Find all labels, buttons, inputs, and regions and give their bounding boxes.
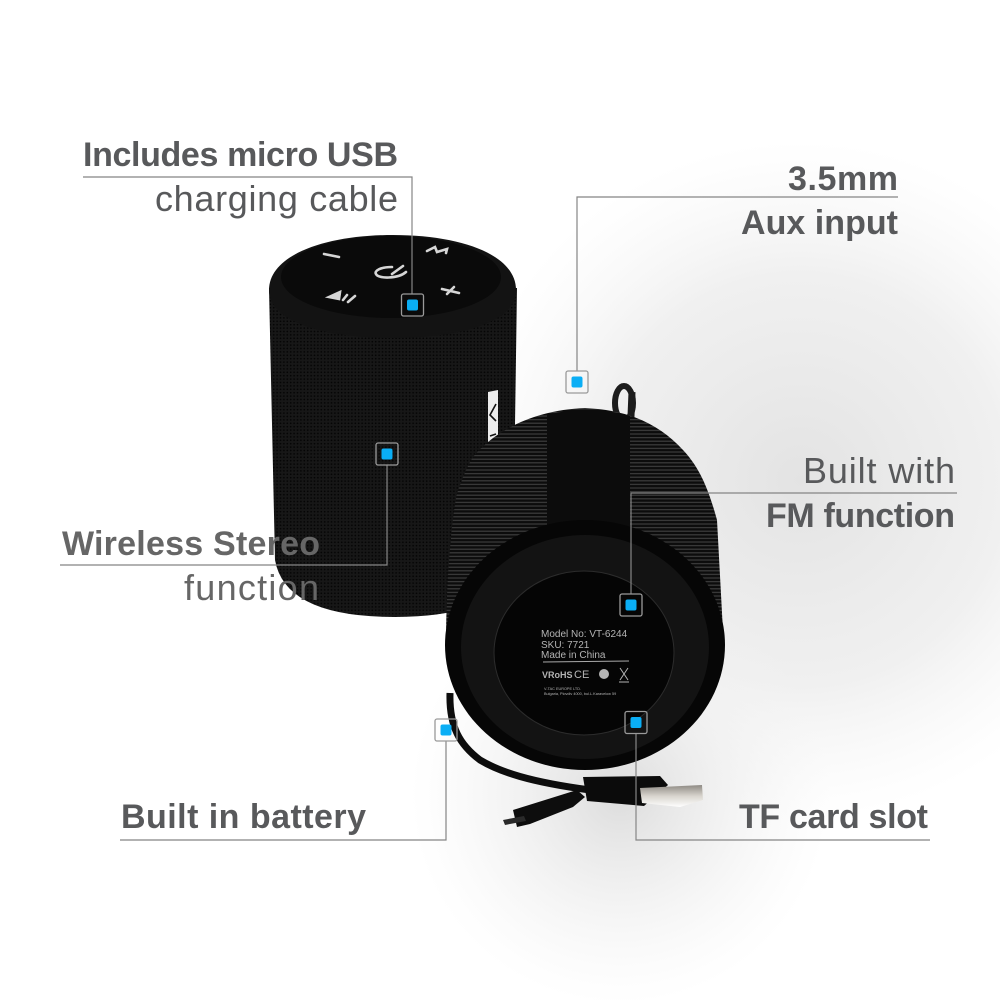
marker [435, 719, 457, 741]
sublabel: FM function [766, 497, 955, 535]
middle disc [461, 535, 709, 759]
marker [566, 371, 588, 393]
micro USB tip [503, 816, 526, 825]
callout: TF card slot [625, 712, 930, 840]
control glyphs [324, 247, 459, 302]
label text [541, 629, 629, 696]
label text: CE [574, 669, 589, 681]
label: Built with [803, 450, 955, 491]
sublabel: function [184, 567, 319, 608]
leader line [120, 741, 446, 840]
label: Built in battery [121, 798, 366, 836]
label: Wireless Stereo [62, 525, 320, 563]
marker [402, 294, 424, 316]
label text: Model No: VT-6244 [541, 629, 628, 640]
callout: FM function [620, 450, 957, 616]
label: Includes micro USB [83, 136, 398, 174]
marker [376, 443, 398, 465]
speaker: lying on side with base label [445, 386, 725, 770]
speaker: upright with touch controls [269, 235, 517, 617]
label: 3.5mm [788, 160, 898, 198]
sublabel: charging cable [155, 178, 398, 219]
label text: SKU: 7721 [541, 640, 590, 651]
label text: Made in China [541, 650, 606, 661]
label disc [494, 571, 674, 735]
base ring [445, 520, 725, 770]
top cap [269, 235, 516, 338]
ribbed body [446, 408, 724, 650]
marker [620, 594, 642, 616]
callout: micro USB cable [83, 136, 424, 316]
label text: Bulgaria, Plovdiv 4000, bul.L.Karavelow 59 [544, 692, 616, 696]
strap loop [615, 386, 633, 440]
callout: aux input [566, 160, 898, 393]
callout: battery [120, 719, 457, 840]
USB-A metal connector [640, 785, 703, 807]
callout: wireless stereo [60, 443, 398, 608]
marker [625, 712, 647, 734]
leader line [636, 733, 930, 840]
centre strip [547, 410, 630, 530]
speaker body [269, 288, 517, 617]
label text: V-TAC EUROPE LTD. [544, 687, 581, 691]
label: TF card slot [739, 798, 928, 836]
leader line [83, 177, 412, 294]
USB cable [450, 693, 703, 827]
sublabel: Aux input [741, 204, 898, 242]
USB-A plug housing [583, 776, 668, 806]
side logo label [488, 390, 498, 462]
braided cord [450, 693, 590, 790]
leader line [631, 493, 957, 594]
micro USB plug [513, 790, 585, 827]
leader line [577, 197, 898, 371]
leader line [60, 465, 387, 565]
label text: VRoHS [542, 670, 573, 680]
touch panel [281, 236, 501, 318]
